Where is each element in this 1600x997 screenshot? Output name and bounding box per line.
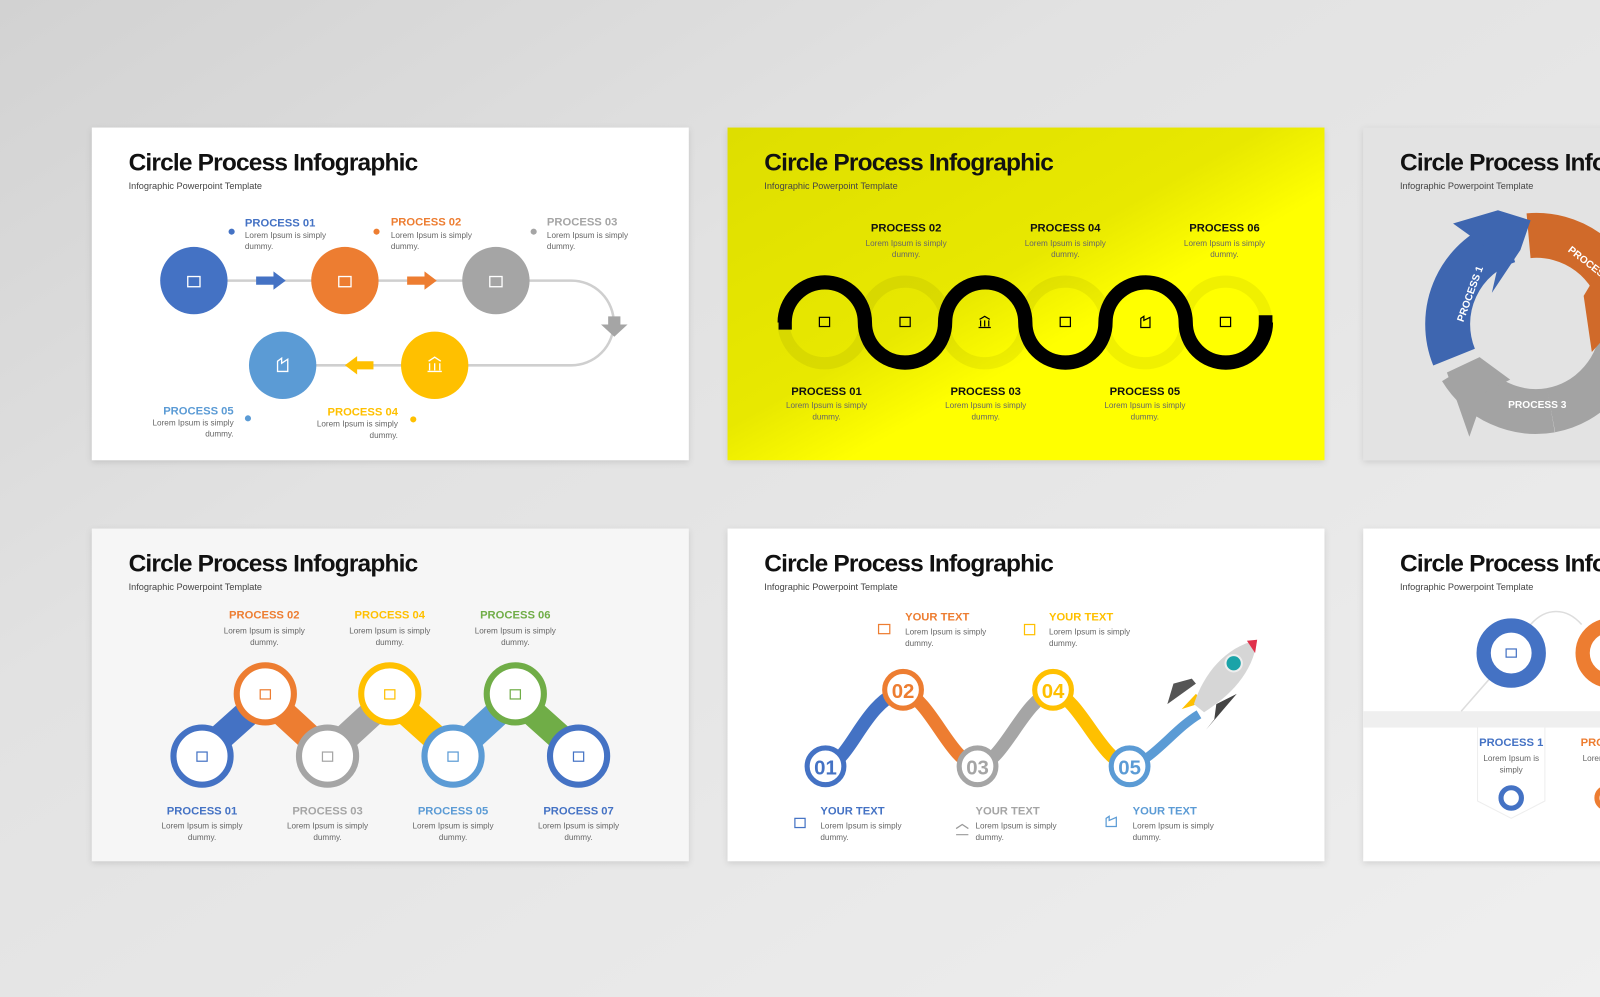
labels: PROCESS 01 bbox=[167, 805, 237, 817]
labels: PROCESS 07 bbox=[543, 805, 614, 817]
labels: PROCESS 06 bbox=[480, 609, 551, 621]
labels: dummy. bbox=[547, 242, 575, 251]
labels: dummy. bbox=[892, 250, 920, 259]
cycle labels: PROCESS 3 bbox=[1508, 400, 1567, 411]
labels: Lorem Ipsum is simply bbox=[538, 822, 620, 831]
process circles bbox=[173, 665, 607, 785]
label tabs bbox=[1478, 728, 1600, 818]
wave path bbox=[779, 282, 1272, 363]
panel: slide 3 cycle arrows (partial) bbox=[1363, 128, 1600, 460]
title: Circle Process Infographic bbox=[129, 149, 418, 176]
labels: Lorem Ipsum is simply bbox=[317, 420, 399, 429]
label tabs: PROCESS 1 bbox=[1479, 737, 1543, 749]
labels: dummy. bbox=[1051, 250, 1080, 259]
connector path bbox=[194, 281, 614, 365]
labels: PROCESS 06 bbox=[1189, 223, 1260, 235]
subtitle: Infographic Powerpoint Template bbox=[129, 181, 262, 191]
text blocks: dummy. bbox=[1133, 833, 1161, 842]
labels: Lorem Ipsum is simply bbox=[1104, 401, 1186, 410]
subtitle: Infographic Powerpoint Template bbox=[764, 181, 898, 191]
text blocks: YOUR TEXT bbox=[820, 805, 885, 817]
labels: Lorem Ipsum is simply bbox=[786, 401, 868, 410]
labels: dummy. bbox=[564, 833, 593, 842]
labels: PROCESS 03 bbox=[547, 217, 617, 229]
labels: PROCESS 05 bbox=[163, 405, 234, 417]
panel: slide 5 rocket roadmap: 03 bbox=[966, 757, 989, 779]
label tabs: simply bbox=[1500, 765, 1524, 774]
labels: Lorem Ipsum is simply bbox=[391, 231, 473, 240]
icon: rocket bbox=[1167, 640, 1257, 730]
panel: slide 5 rocket roadmap bbox=[728, 529, 1324, 861]
panel: slide 2 yellow wave bbox=[728, 128, 1324, 460]
labels: dummy. bbox=[188, 833, 216, 842]
labels: Lorem Ipsum is simply bbox=[1184, 239, 1266, 248]
labels: dummy. bbox=[972, 412, 1000, 421]
labels: PROCESS 04 bbox=[327, 406, 399, 418]
labels: PROCESS 02 bbox=[871, 223, 941, 235]
subtitle: Infographic Powerpoint Template bbox=[129, 582, 262, 592]
labels: Lorem Ipsum is simply bbox=[161, 822, 244, 831]
panel: slide 5 rocket roadmap: 05 bbox=[1118, 757, 1141, 779]
cycle ring bbox=[1448, 235, 1600, 411]
labels: dummy. bbox=[812, 412, 841, 421]
text blocks: dummy. bbox=[1049, 639, 1077, 648]
text blocks: YOUR TEXT bbox=[1049, 611, 1113, 623]
labels: Lorem Ipsum is simply bbox=[245, 231, 327, 240]
text blocks bbox=[795, 611, 1215, 842]
labels bbox=[786, 223, 1266, 421]
labels: dummy. bbox=[205, 430, 234, 439]
labels: Lorem Ipsum is simply bbox=[945, 401, 1027, 410]
title: Circle Process Infographic bbox=[129, 550, 418, 577]
labels: dummy. bbox=[391, 242, 419, 251]
panel: slide 5 rocket roadmap: 02 bbox=[892, 681, 914, 703]
labels: dummy. bbox=[439, 833, 467, 842]
text blocks: Lorem Ipsum is simply bbox=[905, 628, 987, 637]
text blocks: YOUR TEXT bbox=[1133, 805, 1197, 817]
labels: PROCESS 05 bbox=[418, 805, 488, 817]
labels: dummy. bbox=[250, 638, 278, 647]
labels bbox=[153, 217, 629, 440]
labels: PROCESS 01 bbox=[791, 386, 862, 398]
labels: dummy. bbox=[1131, 412, 1159, 421]
text blocks: YOUR TEXT bbox=[976, 805, 1040, 817]
labels: PROCESS 04 bbox=[355, 609, 426, 621]
panel: slide 4 linked circles bbox=[92, 529, 689, 861]
labels: PROCESS 03 bbox=[950, 386, 1021, 398]
panel: slide 6 partial bbox=[1363, 529, 1600, 861]
labels: PROCESS 04 bbox=[1030, 223, 1101, 235]
labels: dummy. bbox=[245, 242, 273, 251]
labels: PROCESS 05 bbox=[1110, 386, 1180, 398]
text blocks: YOUR TEXT bbox=[905, 611, 969, 623]
connectors bbox=[214, 708, 566, 743]
title: Circle Process Infographic bbox=[764, 550, 1053, 577]
labels: Lorem Ipsum is simply bbox=[866, 239, 948, 248]
text blocks: Lorem Ipsum is simply bbox=[976, 822, 1058, 831]
labels: Lorem Ipsum is simply bbox=[349, 627, 431, 636]
labels: PROCESS 03 bbox=[292, 805, 363, 817]
connector lines bbox=[1461, 611, 1582, 711]
labels: dummy. bbox=[313, 833, 342, 842]
labels: Lorem Ipsum is simply bbox=[1025, 239, 1107, 248]
subtitle: Infographic Powerpoint Template bbox=[764, 582, 898, 592]
text blocks: Lorem Ipsum is simply bbox=[1049, 628, 1131, 637]
process circles bbox=[160, 247, 530, 399]
panel: slide 5 rocket roadmap: 04 bbox=[1042, 681, 1065, 703]
labels: PROCESS 02 bbox=[391, 217, 461, 229]
labels: Lorem Ipsum is simply bbox=[412, 822, 495, 831]
roadmap path bbox=[826, 690, 1199, 766]
panel: slide 5 rocket roadmap: 01 bbox=[814, 757, 837, 779]
text blocks: dummy. bbox=[976, 833, 1004, 842]
labels: dummy. bbox=[370, 431, 398, 440]
subtitle: Infographic Powerpoint Template bbox=[1400, 582, 1533, 592]
text blocks: Lorem Ipsum is simply bbox=[820, 822, 902, 831]
labels bbox=[161, 609, 620, 842]
labels: dummy. bbox=[376, 638, 404, 647]
cycle labels: PROCESS 1 bbox=[1456, 265, 1486, 323]
labels: dummy. bbox=[1210, 250, 1239, 259]
labels: PROCESS 02 bbox=[229, 609, 300, 621]
ring circles bbox=[1484, 626, 1600, 681]
arrows bbox=[256, 271, 628, 374]
text blocks: dummy. bbox=[905, 639, 934, 648]
text blocks: Lorem Ipsum is simply bbox=[1133, 822, 1215, 831]
title: Circle Process Infographic bbox=[764, 149, 1053, 176]
labels: Lorem Ipsum is simply bbox=[547, 231, 629, 240]
text blocks: dummy. bbox=[820, 833, 849, 842]
subtitle: Infographic Powerpoint Template bbox=[1400, 181, 1533, 191]
labels: Lorem Ipsum is simply bbox=[224, 627, 306, 636]
cycle labels bbox=[1456, 245, 1600, 411]
faint circles bbox=[784, 282, 1266, 363]
labels: Lorem Ipsum is simply bbox=[475, 627, 557, 636]
labels: Lorem Ipsum is simply bbox=[287, 822, 369, 831]
number nodes bbox=[807, 671, 1148, 785]
labels: PROCESS 01 bbox=[245, 218, 315, 230]
label tabs: Lorem Ipsum is bbox=[1483, 754, 1539, 763]
labels: dummy. bbox=[501, 638, 530, 647]
panel: slide 1 sequential process bbox=[92, 128, 689, 460]
labels: Lorem Ipsum is simply bbox=[153, 419, 235, 428]
icons bbox=[819, 316, 1231, 328]
